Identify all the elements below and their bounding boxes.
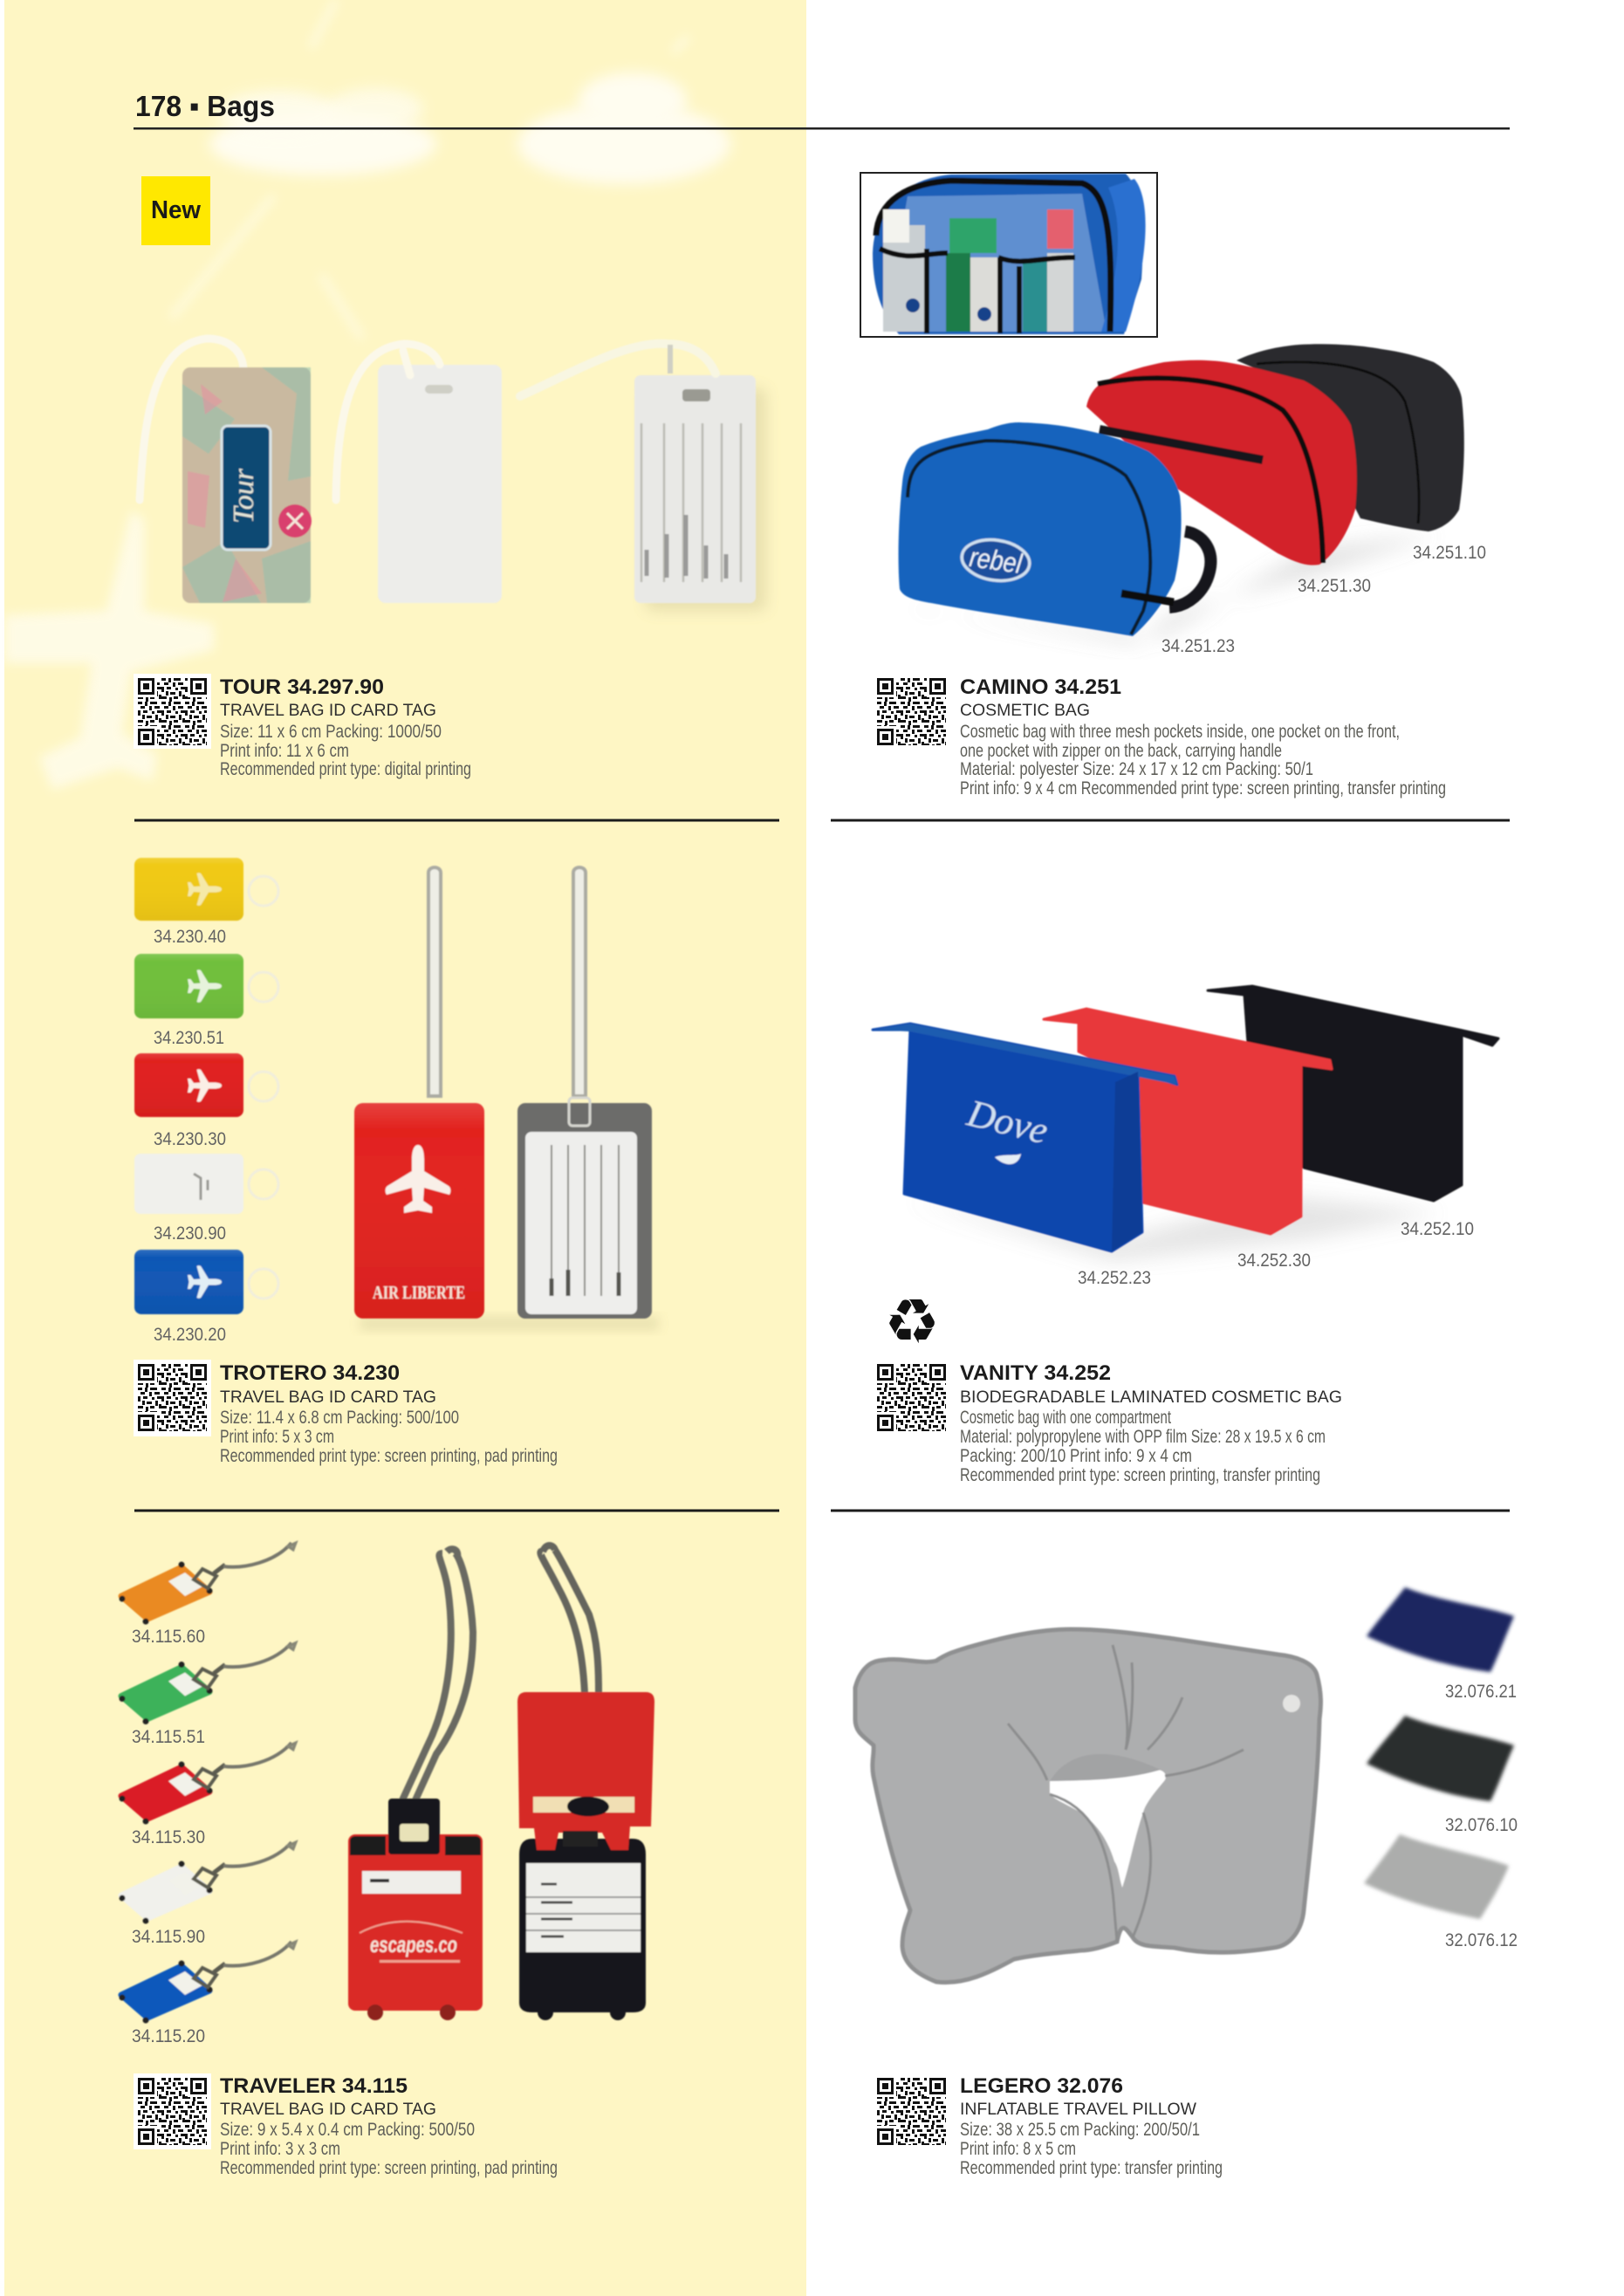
item codes: 34.252.10 xyxy=(1401,1219,1474,1239)
swatch: grey pouch xyxy=(1364,1834,1509,1919)
colour swatches xyxy=(134,858,278,1314)
product text: Size: 9 x 5.4 x 0.4 cm Packing: 500/50 xyxy=(220,2120,475,2140)
product photo: three laminated bags: Dove xyxy=(963,1091,1052,1153)
product text: TROTERO 34.230 xyxy=(220,1361,400,1385)
product text: Recommended print type: screen printing, pad printing xyxy=(220,2158,558,2178)
product text: Size: 11 x 6 cm Packing: 1000/50 xyxy=(220,722,442,742)
inset photo: bag interior xyxy=(860,173,1157,337)
swatch: blue xyxy=(119,1942,296,2023)
item codes: 34.252.30 xyxy=(1237,1251,1311,1271)
product text: one pocket with zipper on the back, carrying handle xyxy=(960,741,1282,761)
swatch codes: 32.076.21 xyxy=(1445,1682,1517,1702)
panel: Legero pillow xyxy=(855,1587,1518,2178)
QR code xyxy=(134,2073,211,2149)
swatch codes: 34.115.20 xyxy=(132,2026,205,2046)
product photo: red tag front and grey tag back xyxy=(354,867,659,1331)
section divider row 1 xyxy=(134,819,1510,822)
swatch codes: 34.115.51 xyxy=(132,1727,205,1747)
product text: CAMINO 34.251 xyxy=(960,675,1121,699)
product photo: black back tag with red flap xyxy=(517,1546,654,2020)
product photo: three cosmetic bags: rebel xyxy=(968,541,1024,579)
swatch codes: 34.115.30 xyxy=(132,1827,205,1847)
product text: Print info: 3 x 3 cm xyxy=(220,2139,340,2159)
product text: Material: polypropylene with OPP film Size: 28 x 19.5 x 6 cm xyxy=(960,1427,1326,1447)
product text xyxy=(960,1361,1342,1485)
swatch: yellow xyxy=(134,858,278,921)
swatch: red xyxy=(119,1743,296,1824)
panel: Traveler tag xyxy=(119,1543,654,2178)
swatch: orange xyxy=(119,1543,296,1625)
product text xyxy=(220,2074,558,2178)
product text: Cosmetic bag with three mesh pockets inside, one pocket on the front, xyxy=(960,722,1400,742)
product text: VANITY 34.252 xyxy=(960,1361,1111,1385)
swatch codes: 34.230.20 xyxy=(154,1325,226,1345)
product photo: three cosmetic bags xyxy=(899,344,1464,644)
swatch: white xyxy=(134,1154,278,1214)
QR code xyxy=(877,1364,946,1431)
product text: Recommended print type: transfer printing xyxy=(960,2158,1223,2178)
product text xyxy=(960,675,1446,798)
product text: Print info: 5 x 3 cm xyxy=(220,1427,334,1447)
item codes: 34.251.10 xyxy=(1413,543,1486,563)
item codes: 34.251.23 xyxy=(1161,636,1235,656)
swatch: navy pouch xyxy=(1367,1587,1514,1672)
product text: Recommended print type: digital printing xyxy=(220,759,471,779)
QR code xyxy=(877,2078,946,2145)
product text: BIODEGRADABLE LAMINATED COSMETIC BAG xyxy=(960,1388,1342,1407)
page heading: 178 ▪ Bags xyxy=(135,90,275,122)
panel: Vanity cosmetic bag xyxy=(873,986,1498,1485)
New badge: New xyxy=(151,196,201,224)
item codes xyxy=(1161,543,1486,656)
swatch codes: 34.230.40 xyxy=(154,927,226,947)
QR code xyxy=(134,674,211,749)
New badge xyxy=(141,176,210,245)
product photo: three tour tags xyxy=(140,339,766,611)
icon: recycling symbol: ♻ xyxy=(884,1285,940,1358)
QR code xyxy=(877,678,946,745)
product text: Print info: 8 x 5 cm xyxy=(960,2139,1076,2159)
product text: TRAVEL BAG ID CARD TAG xyxy=(220,701,436,720)
product text: TRAVEL BAG ID CARD TAG xyxy=(220,1388,436,1407)
product text: Print info: 11 x 6 cm xyxy=(220,741,349,761)
product text xyxy=(220,1361,558,1466)
product text: Material: polyester Size: 24 x 17 x 12 cm Packing: 50/1 xyxy=(960,759,1313,779)
swatch codes: 32.076.10 xyxy=(1445,1815,1518,1835)
product text: LEGERO 32.076 xyxy=(960,2074,1123,2098)
swatch codes: 34.115.60 xyxy=(132,1627,205,1647)
product text: TRAVELER 34.115 xyxy=(220,2074,408,2098)
swatch: green xyxy=(119,1642,296,1724)
product text: Size: 38 x 25.5 cm Packing: 200/50/1 xyxy=(960,2120,1200,2140)
product text: TRAVEL BAG ID CARD TAG xyxy=(220,2100,436,2119)
panel: Camino cosmetic bag xyxy=(860,173,1486,798)
swatch: red xyxy=(134,1053,278,1117)
swatch: white xyxy=(119,1842,296,1923)
item codes: 34.252.23 xyxy=(1078,1268,1151,1288)
product text xyxy=(220,675,471,779)
product text: COSMETIC BAG xyxy=(960,701,1090,720)
product photo: grey inflatable pillow xyxy=(855,1629,1321,1983)
swatch codes xyxy=(154,927,226,1345)
panel: Tour tag xyxy=(134,339,766,779)
product text: Size: 11.4 x 6.8 cm Packing: 500/100 xyxy=(220,1408,459,1428)
item codes: 34.251.30 xyxy=(1298,576,1371,596)
swatch codes: 34.230.30 xyxy=(154,1129,226,1149)
product text: Packing: 200/10 Print info: 9 x 4 cm xyxy=(960,1446,1192,1466)
product text xyxy=(960,2074,1223,2178)
product text: INFLATABLE TRAVEL PILLOW xyxy=(960,2100,1197,2119)
swatch codes: 34.230.51 xyxy=(154,1028,224,1048)
item codes xyxy=(1078,1219,1474,1288)
product photo: red front tag: escapes.co xyxy=(370,1931,457,1957)
swatch: blue xyxy=(134,1250,278,1314)
swatch codes xyxy=(132,1627,205,2046)
swatch: black pouch xyxy=(1367,1716,1514,1801)
product text: Print info: 9 x 4 cm Recommended print type: screen printing, transfer printing xyxy=(960,778,1446,798)
product text: Recommended print type: screen printing, pad printing xyxy=(220,1446,558,1466)
product photo: red front tag xyxy=(348,1549,483,2020)
product photo: three laminated bags xyxy=(873,986,1498,1261)
sky decoration: clouds, contrails and plane xyxy=(4,0,730,790)
product photo: three tour tags: Tour xyxy=(228,468,260,524)
product text: Cosmetic bag with one compartment xyxy=(960,1408,1171,1428)
swatch: green xyxy=(134,954,278,1018)
colour swatches xyxy=(119,1543,296,2023)
QR code xyxy=(134,1360,211,1436)
panel: Trotero tag xyxy=(134,858,659,1466)
product photo: red tag front and grey tag back: AIR LIBERTE xyxy=(373,1282,465,1303)
swatch codes: 34.230.90 xyxy=(154,1223,226,1244)
swatch codes: 32.076.12 xyxy=(1445,1930,1518,1950)
product text: Recommended print type: screen printing, transfer printing xyxy=(960,1465,1320,1485)
product text: TOUR 34.297.90 xyxy=(220,675,384,699)
swatch codes: 34.115.90 xyxy=(132,1927,205,1947)
swatch codes xyxy=(1445,1682,1518,1950)
section divider row 2 xyxy=(134,1510,1510,1511)
